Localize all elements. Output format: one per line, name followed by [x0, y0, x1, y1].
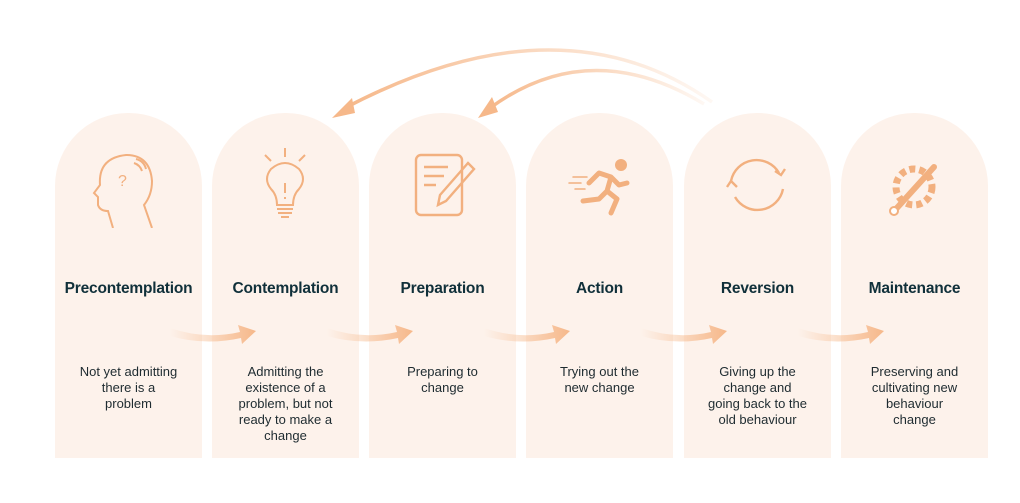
text: ready to make a	[239, 412, 332, 427]
text: change and	[724, 380, 791, 395]
text: behaviour	[886, 396, 943, 411]
heading: Action	[576, 280, 623, 297]
panel: contemplation	[212, 113, 359, 458]
text: Preserving and	[871, 364, 958, 379]
text: problem	[105, 396, 152, 411]
text	[407, 364, 478, 395]
text	[871, 364, 958, 427]
text: old behaviour	[718, 412, 797, 427]
arrows: between panels	[170, 325, 884, 344]
icon: bulb	[264, 148, 306, 218]
text	[708, 364, 807, 427]
icon: notepad	[414, 154, 476, 216]
panel: reversion	[684, 113, 831, 458]
text: cultivating new	[872, 380, 957, 395]
heading: Precontemplation	[65, 280, 192, 297]
text: Admitting the	[248, 364, 323, 379]
icon: gear and wrench	[889, 164, 937, 216]
text: Preparing to	[407, 364, 478, 379]
text	[239, 364, 332, 443]
text: new change	[564, 380, 635, 395]
icon: head	[92, 154, 153, 228]
text: existence of a	[245, 380, 326, 395]
heading: Reversion	[721, 280, 794, 297]
text: going back to the	[708, 396, 807, 411]
text: Not yet admitting	[80, 364, 177, 379]
text: problem, but not	[239, 396, 332, 411]
panel: maintenance	[841, 113, 988, 458]
text: Giving up the	[719, 364, 796, 379]
text: change	[893, 412, 936, 427]
text: change	[264, 428, 307, 443]
icon: cycle	[726, 158, 786, 212]
heading: Maintenance	[869, 280, 960, 297]
arrow: back to contemplation	[332, 50, 712, 118]
heading: Contemplation	[233, 280, 338, 297]
panel: action	[526, 113, 673, 458]
text: change	[421, 380, 464, 395]
text: there is a	[102, 380, 155, 395]
icon: runner	[568, 159, 630, 216]
heading: Preparation	[401, 280, 484, 297]
panel: precontemplation	[55, 113, 202, 458]
text	[80, 364, 177, 411]
text	[560, 364, 639, 395]
icon: head: ?	[118, 173, 127, 190]
panel: preparation	[369, 113, 516, 458]
text: Trying out the	[560, 364, 639, 379]
arrow: back to preparation	[478, 70, 704, 118]
